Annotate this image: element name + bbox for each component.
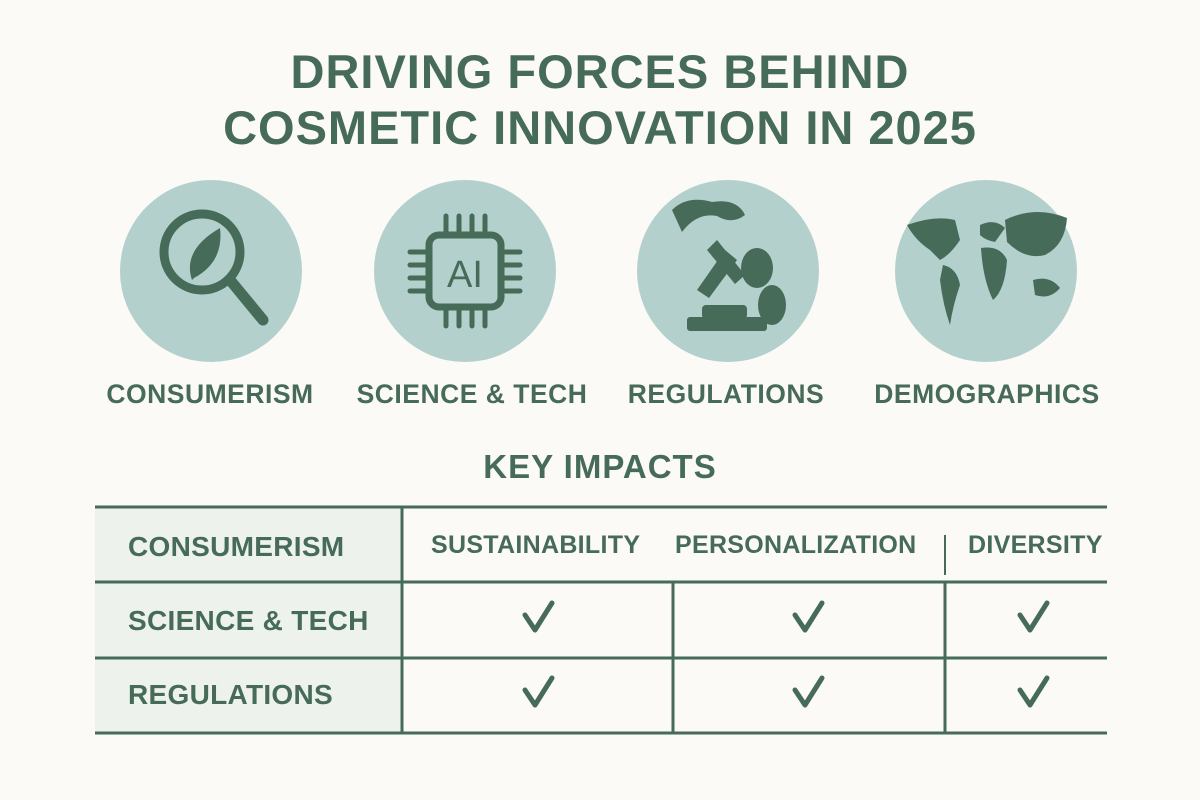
label: consumerism: CONSUMERISM — [106, 379, 314, 409]
icon: AI chip — [374, 180, 556, 362]
title: DRIVING FORCES BEHIND — [290, 45, 910, 98]
column: diversity: DIVERSITY — [968, 531, 1103, 559]
icon: AI chip: AI — [447, 254, 483, 296]
heading: key impacts: KEY IMPACTS — [483, 448, 717, 485]
icon: world map — [895, 180, 1077, 362]
label: regulations: REGULATIONS — [628, 379, 824, 409]
column: sustainability: SUSTAINABILITY — [431, 531, 640, 559]
title: COSMETIC INNOVATION IN 2025 — [223, 101, 977, 154]
title — [223, 45, 977, 154]
label: science & tech: SCIENCE & TECH — [357, 379, 587, 409]
column: personalization: PERSONALIZATION — [675, 531, 917, 559]
icon: gavel — [637, 180, 819, 362]
row header: science & tech: SCIENCE & TECH — [128, 605, 369, 636]
row header: consumerism: CONSUMERISM — [128, 531, 344, 562]
table — [95, 506, 1107, 734]
label: demographics: DEMOGRAPHICS — [874, 379, 1100, 409]
row header: regulations: REGULATIONS — [128, 679, 333, 710]
icon: magnifier with leaf — [120, 180, 302, 362]
